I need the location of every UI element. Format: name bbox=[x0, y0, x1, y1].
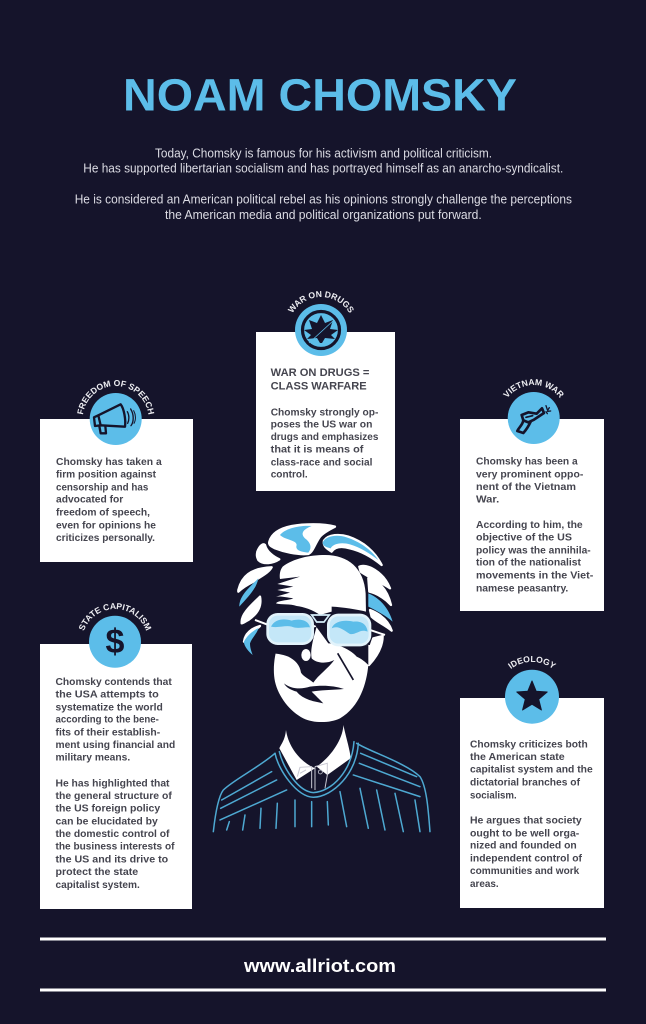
intro text bbox=[75, 146, 572, 222]
text: state capitalism body: the domestic control of bbox=[56, 829, 170, 840]
text: ideology body: socialism. bbox=[470, 790, 517, 801]
panel: state capitalism bbox=[40, 603, 192, 909]
intro text: the American media and political organizations put forward. bbox=[165, 208, 482, 222]
text: state capitalism body: systematize the world bbox=[56, 702, 163, 713]
text: state capitalism body: protect the state bbox=[56, 867, 138, 878]
text: ideology body: Chomsky criticizes both bbox=[470, 739, 588, 750]
panel: vietnam war bbox=[460, 379, 604, 611]
text: state capitalism body: can be elucidated by bbox=[56, 816, 158, 827]
text: vietnam war body: nent of the Vietnam bbox=[476, 482, 576, 493]
text: freedom of speech body: Chomsky has taken a bbox=[56, 457, 162, 468]
text: war on drugs body: poses the US war on bbox=[271, 420, 372, 431]
text: vietnam war body bbox=[476, 456, 594, 595]
icon: megaphone bbox=[90, 393, 142, 445]
text: ideology body bbox=[470, 739, 593, 890]
shirt collar bbox=[279, 725, 351, 790]
text: war on drugs body: control. bbox=[271, 470, 308, 481]
panel: ideology bbox=[460, 656, 604, 908]
curved label: vietnam war: VIETNAM WAR bbox=[502, 379, 564, 398]
text: vietnam war body: policy was the annihila- bbox=[476, 545, 591, 556]
text: freedom of speech body: criticizes personally. bbox=[56, 533, 155, 544]
text: freedom of speech body: advocated for bbox=[56, 494, 123, 506]
text: state capitalism body: fits of their establish- bbox=[56, 727, 161, 738]
text: ideology body: communities and work bbox=[470, 866, 580, 877]
intro text: Today, Chomsky is famous for his activism and political criticism. bbox=[155, 146, 492, 160]
text: state capitalism body: capitalist system. bbox=[56, 880, 140, 891]
heading: war on drugs bbox=[271, 367, 369, 392]
text: ideology body: capitalist system and the bbox=[470, 764, 593, 775]
text: vietnam war body: Chomsky has been a bbox=[476, 456, 578, 467]
text: state capitalism body: the US foreign policy bbox=[56, 804, 160, 815]
intro text: He is considered an American political rebel as his opinions strongly challenge the perceptions bbox=[75, 193, 572, 207]
text: vietnam war body: objective of the US bbox=[476, 532, 572, 543]
text: freedom of speech body: freedom of speech, bbox=[56, 507, 150, 518]
text: war on drugs body: Chomsky strongly op- bbox=[271, 407, 379, 418]
text: war on drugs body: class-race and social bbox=[271, 457, 373, 468]
text: vietnam war body: According to him, the bbox=[476, 520, 583, 531]
heading: war on drugs: CLASS WARFARE bbox=[271, 380, 367, 392]
text: freedom of speech body: even for opinions he bbox=[56, 520, 156, 531]
text: freedom of speech body bbox=[56, 457, 162, 544]
text: war on drugs body bbox=[271, 407, 379, 481]
text: freedom of speech body: censorship and has bbox=[56, 482, 149, 493]
text: state capitalism body: the business interests of bbox=[56, 841, 175, 852]
icon: star bbox=[505, 670, 559, 724]
portrait: Noam Chomsky bbox=[213, 524, 430, 832]
heading: war on drugs: WAR ON DRUGS = bbox=[271, 367, 369, 379]
curved label: war on drugs: WAR ON DRUGS bbox=[288, 291, 354, 312]
text: ideology body: nized and founded on bbox=[470, 841, 577, 852]
icon: crossed-out leaf bbox=[295, 304, 347, 356]
footer: www.allriot.com bbox=[243, 956, 396, 976]
icon: dollar sign: $ bbox=[106, 623, 125, 661]
text: state capitalism body: the general structure of bbox=[56, 791, 172, 802]
sweater bbox=[213, 742, 430, 832]
text: vietnam war body: namese peasantry. bbox=[476, 584, 568, 595]
text: ideology body: independent control of bbox=[470, 853, 583, 864]
text: state capitalism body: according to the bene- bbox=[56, 715, 159, 726]
curved label: state capitalism: STATE CAPITALISM bbox=[79, 603, 152, 631]
text: ideology body: areas. bbox=[470, 879, 499, 890]
title: NOAM CHOMSKY bbox=[123, 70, 517, 120]
panel: freedom of speech bbox=[40, 380, 193, 562]
text: ideology body: ought to be well orga- bbox=[470, 828, 580, 839]
hair bbox=[238, 524, 393, 665]
text: ideology body: He argues that society bbox=[470, 816, 582, 827]
face bbox=[268, 555, 383, 722]
text: vietnam war body: War. bbox=[476, 495, 499, 506]
glasses bbox=[255, 614, 385, 645]
text: state capitalism body: the US and its drive to bbox=[56, 854, 168, 865]
text: war on drugs body: drugs and emphasizes bbox=[271, 432, 379, 443]
text: vietnam war body: tion of the nationalist bbox=[476, 558, 582, 569]
panel: war on drugs bbox=[256, 291, 395, 491]
intro text: He has supported libertarian socialism and has portrayed himself as an anarcho-syndicalist. bbox=[83, 162, 563, 176]
icon: revolver bbox=[508, 392, 560, 444]
text: state capitalism body: the USA attempts to bbox=[56, 690, 159, 701]
icon: dollar sign bbox=[89, 616, 141, 668]
text: state capitalism body bbox=[56, 677, 175, 891]
text: state capitalism body: ment using financial and bbox=[56, 740, 175, 751]
text: war on drugs body: that it is means of bbox=[271, 445, 364, 456]
text: vietnam war body: movements in the Viet- bbox=[476, 571, 594, 582]
text: ideology body: dictatorial branches of bbox=[470, 778, 581, 789]
text: vietnam war body: very prominent oppo- bbox=[476, 469, 584, 480]
text: state capitalism body: Chomsky contends that bbox=[56, 677, 172, 688]
footer bbox=[40, 938, 606, 992]
curved label: freedom of speech: FREEDOM OF SPEECH bbox=[77, 380, 154, 414]
curved label: ideology: IDEOLOGY bbox=[508, 656, 556, 669]
text: state capitalism body: military means. bbox=[56, 753, 130, 764]
text: ideology body: the American state bbox=[470, 752, 565, 763]
text: freedom of speech body: firm position against bbox=[56, 470, 157, 481]
text: state capitalism body: He has highlighted that bbox=[56, 778, 170, 789]
